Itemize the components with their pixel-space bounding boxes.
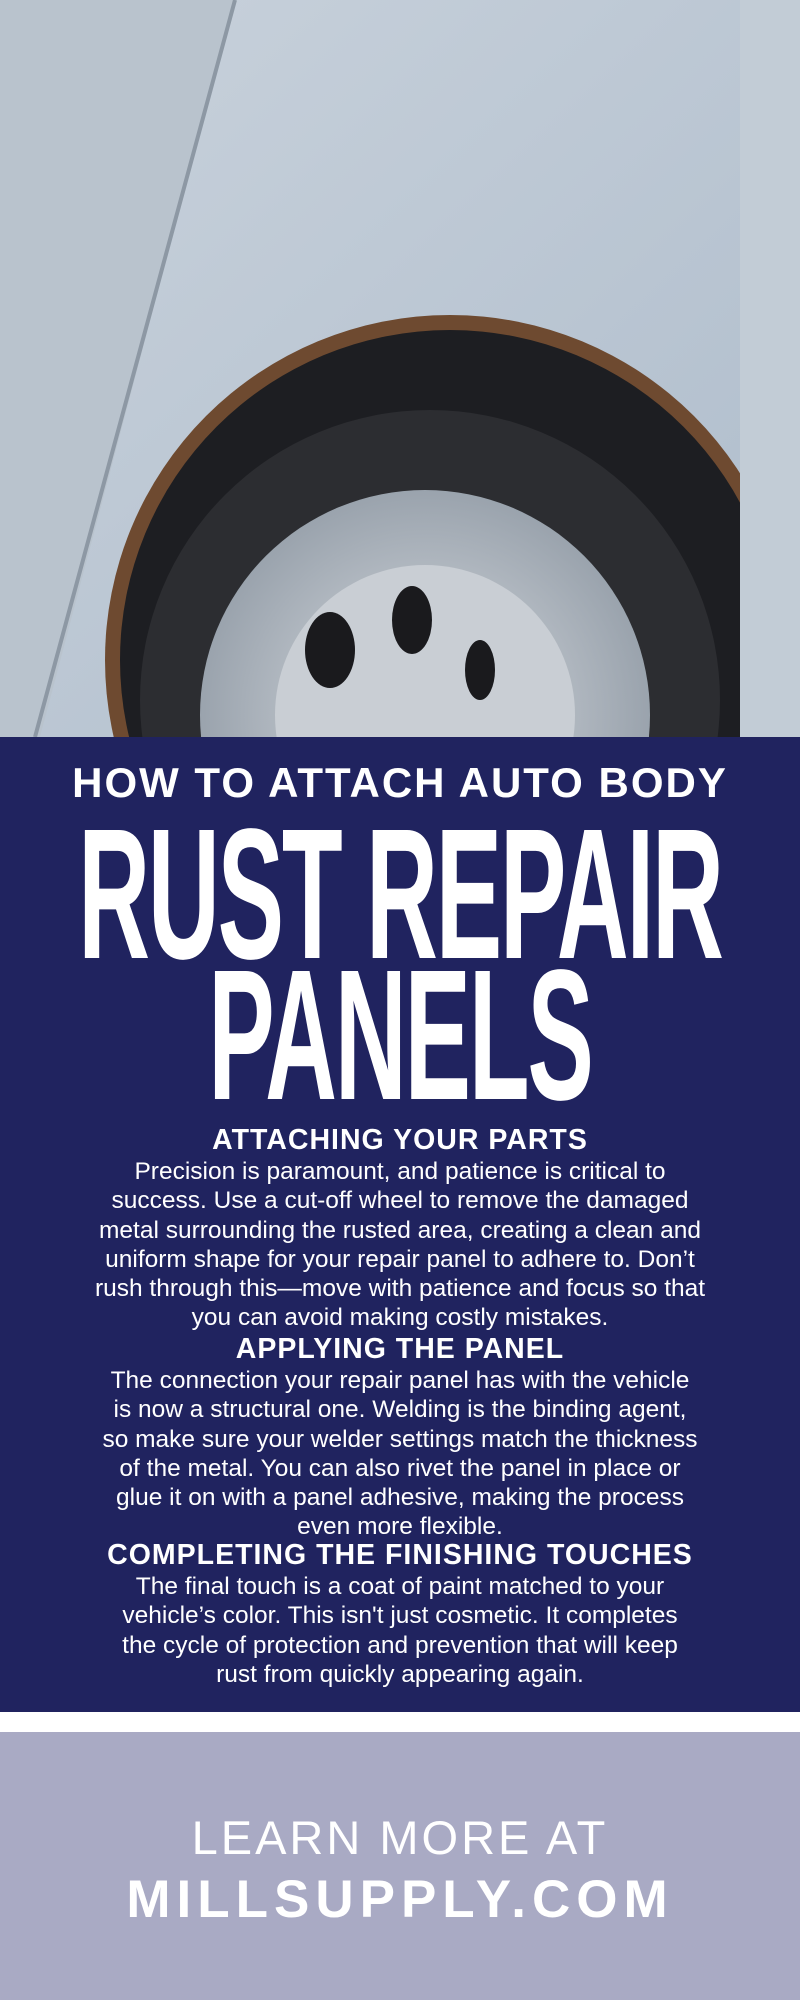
section: attaching your parts: success. Use a cut-off wheel to remove the damaged [112,1187,688,1214]
footer: learn more: LEARN MORE AT [192,1811,608,1864]
section: applying the panel: so make sure your welder settings match the thickness [102,1426,698,1453]
title: HOW TO ATTACH AUTO BODY [72,759,728,806]
footer: learn more: MILLSUPPLY.COM [126,1870,674,1929]
section: applying the panel: glue it on with a panel adhesive, making the process [116,1484,684,1511]
section: attaching your parts: you can avoid making costly mistakes. [192,1304,608,1331]
footer: learn more [0,1732,800,2000]
section: applying the panel: of the metal. You can also rivet the panel in place or [119,1455,681,1482]
section: finishing touches [107,1539,693,1688]
title: RUST REPAIR [78,791,722,998]
title [72,759,728,1139]
section: attaching your parts: metal surrounding the rusted area, creating a clean and [99,1217,701,1244]
section: finishing touches: rust from quickly appearing again. [216,1661,584,1688]
title: PANELS [208,932,592,1139]
section: finishing touches: the cycle of protection and prevention that will keep [122,1632,678,1659]
section: attaching your parts: uniform shape for your repair panel to adhere to. Don’t [105,1246,695,1273]
section: applying the panel [102,1333,698,1540]
section: finishing touches: COMPLETING THE FINISHING TOUCHES [107,1539,693,1571]
section: applying the panel: The connection your repair panel has with the vehicle [111,1367,689,1394]
photo: rusted wheel arch [0,0,800,737]
section: attaching your parts: rush through this—move with patience and focus so that [95,1275,705,1302]
section: finishing touches: vehicle’s color. This isn't just cosmetic. It completes [122,1602,678,1629]
section: applying the panel: is now a structural one. Welding is the binding agent, [114,1396,686,1423]
section: applying the panel: even more flexible. [297,1513,503,1540]
section: attaching your parts: ATTACHING YOUR PARTS [212,1124,588,1156]
section: applying the panel: APPLYING THE PANEL [236,1333,564,1365]
section: attaching your parts [95,1124,705,1331]
section: finishing touches: The final touch is a coat of paint matched to your [136,1573,664,1600]
section: attaching your parts: Precision is paramount, and patience is critical to [134,1158,666,1185]
navy content panel [0,737,800,1712]
